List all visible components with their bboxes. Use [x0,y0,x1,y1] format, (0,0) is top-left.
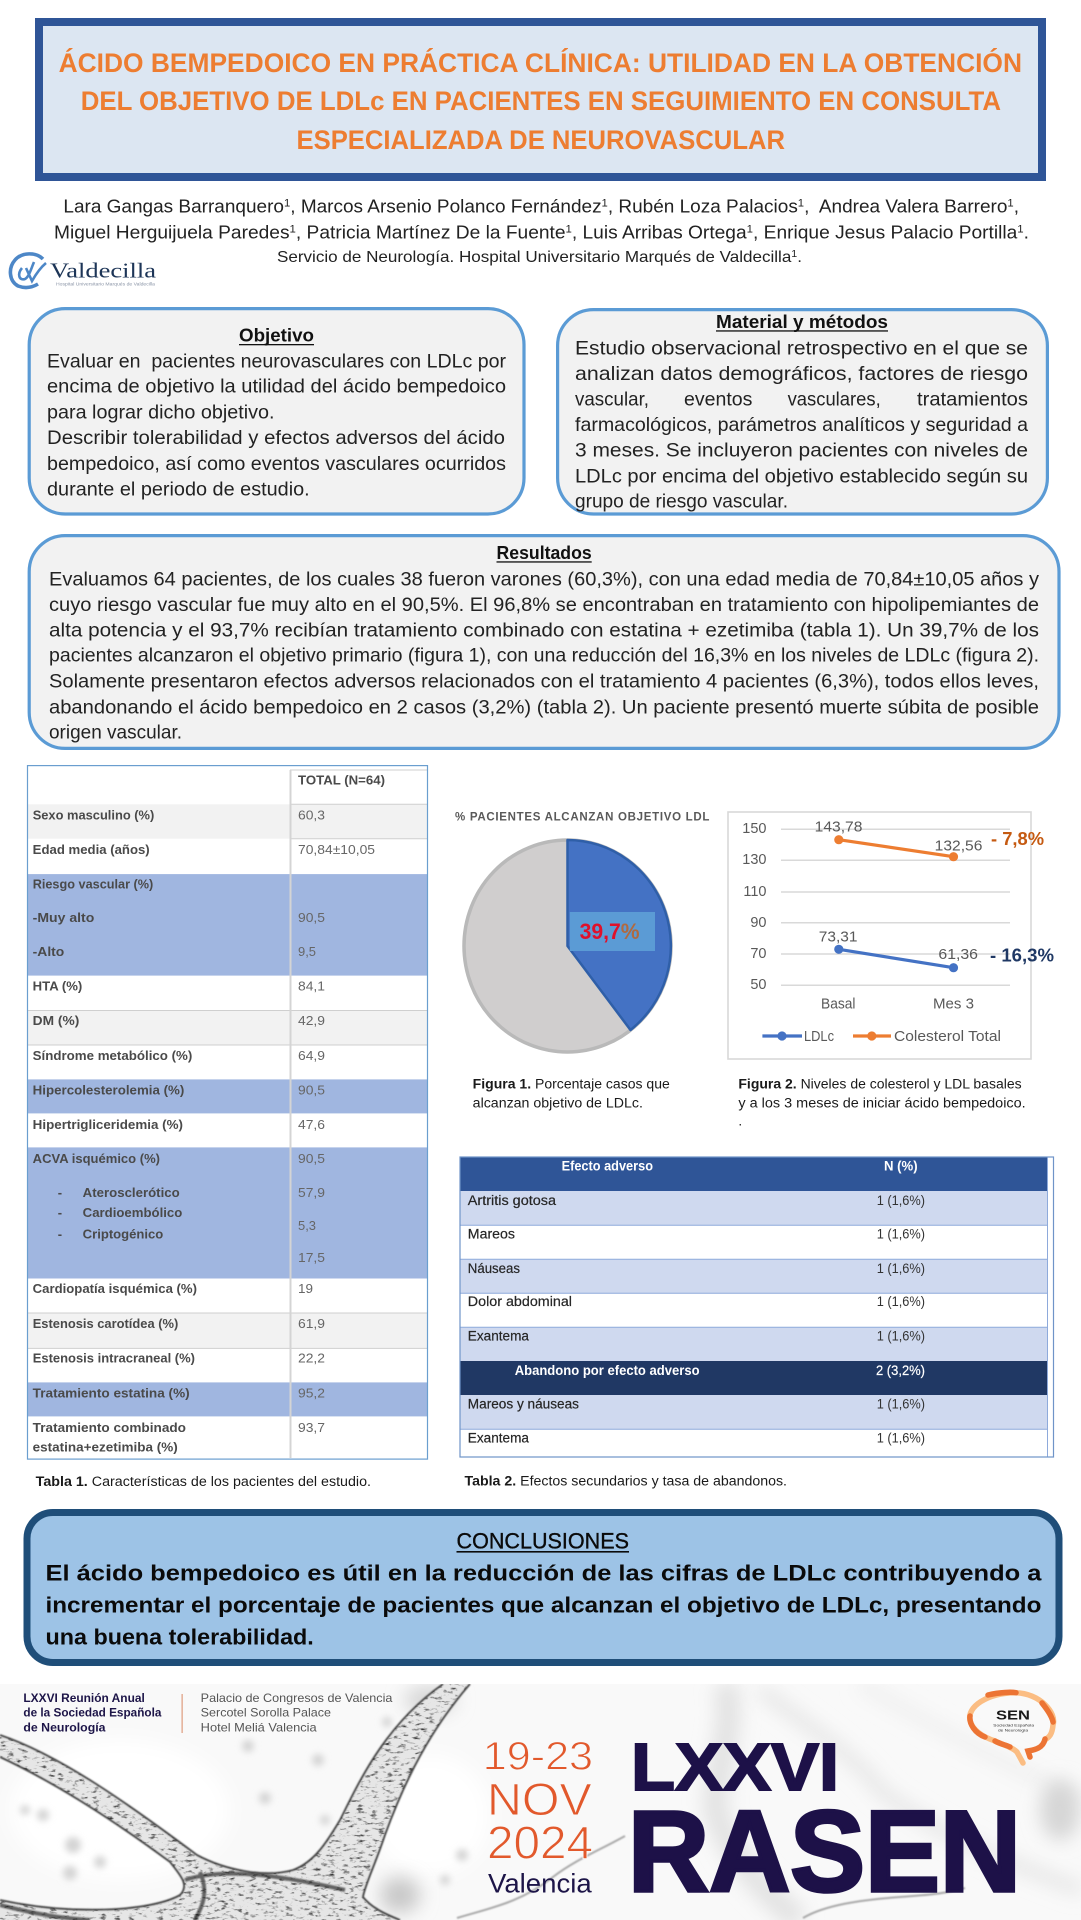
table 2: adverse effects: Exantema [468,1431,529,1446]
text: material y métodos: analizan datos demográficos, factores de riesgo [575,363,1028,385]
congress wordmark: RASEN [628,1788,1021,1916]
table 1: patient characteristics: 90,5 [298,1082,325,1098]
series: LDLc [834,945,958,972]
table 1: patient characteristics: 42,9 [298,1013,325,1028]
text: material y métodos: eventos [684,389,753,411]
authors and affiliation: 1 [1017,224,1024,236]
authors and affiliation: , Rubén Loza Palacios [608,196,798,217]
caption: figura 2 [738,1076,1026,1129]
data labels: 61,36 [938,947,978,963]
table 1: patient characteristics: ACVA isquémico (%) [33,1151,160,1166]
panel: objetivo [29,309,524,514]
venue and meeting text: Sercotel Sorolla Palace [201,1706,331,1720]
authors and affiliation: Miguel Herguijuela Paredes [54,222,281,243]
value label: 39,7% [580,919,640,944]
y axis labels: 130 [742,852,766,868]
table 2: adverse effects: 1 (1,6%) [877,1329,925,1344]
table 1: patient characteristics: 57,9 [298,1185,325,1200]
rows [460,1157,1054,1457]
text: objetivo: durante el periodo de estudio. [47,479,310,501]
y axis labels [742,821,766,993]
table 2: adverse effects: N (%) [884,1159,918,1174]
text: material y métodos [575,337,1028,513]
x axis labels: Mes 3 [933,997,974,1013]
neuron texture [0,1684,480,1920]
callout: LDLc change: - 16,3% [990,946,1054,966]
authors and affiliation: 1 [791,249,798,260]
caption: figura 1 [473,1076,670,1110]
table 1: patient characteristics: Síndrome metabólico (%) [33,1048,192,1063]
data labels [815,820,982,963]
legend [762,1029,1001,1045]
venue and meeting text: LXXVI Reunión Anual [23,1691,145,1705]
y axis labels: 50 [750,977,766,993]
title text: ESPECIALIZADA DE NEUROVASCULAR [296,125,785,155]
text: resultados: origen vascular. [49,722,182,744]
text: conclusiones: El ácido bempedoico es útil en la reducción de las cifras de LDLc contribuyendo a [46,1561,1042,1586]
table 1: patient characteristics: Edad media (años) [33,842,150,857]
text: objetivo: Evaluar en pacientes neurovasculares con LDLc por [47,351,507,373]
venue and meeting text [23,1691,393,1735]
background: blurred neurons [0,1684,1081,1920]
title text: DEL OBJETIVO DE LDLc EN PACIENTES EN SEGUIMIENTO EN CONSULTA [81,86,1001,116]
table 2: adverse effects: Náuseas [468,1261,520,1276]
logo: SEN brain: de Neurología [998,1728,1029,1732]
authors and affiliation: Servicio de Neurología. Hospital Universitario Marqués de Valdecilla [277,249,760,266]
table 1: patient characteristics: 61,9 [298,1316,325,1331]
table 1: patient characteristics: estatina+ezetimiba (%) [33,1440,178,1455]
table 1: patient characteristics: - [58,1205,62,1220]
text: resultados [49,569,1039,744]
text: resultados: cuyo riesgo vascular fue muy alto en el 90,5%. El 96,8% se encontraban en tratamiento con hipolipemiantes de [49,594,1039,616]
table 1: patient characteristics: HTA (%) [33,979,82,994]
table 2: adverse effects: 1 (1,6%) [877,1396,925,1411]
authors and affiliation: 1 [566,224,572,236]
data labels: 132,56 [935,838,982,854]
text: material y métodos: LDLc por encima del objetivo establecido según su [575,465,1028,487]
table 1: patient characteristics: 93,7 [298,1420,325,1435]
authors and affiliation: , Andrea Valera Barrero [804,196,1007,217]
authors and affiliation: Lara Gangas Barranquero [63,196,278,217]
logo: Valdecilla: Valdecilla [50,259,157,283]
congress wordmark: LXXVI [631,1730,839,1805]
congress wordmark [628,1730,1021,1916]
table 2: adverse effects: Exantema [468,1329,529,1344]
table 1: patient characteristics: Estenosis intracraneal (%) [33,1351,195,1366]
y axis labels: 150 [742,821,766,837]
text: conclusiones: una buena tolerabilidad. [46,1624,314,1649]
text: objetivo: encima de objetivo la utilidad del ácido bempedoico [47,376,506,398]
legend: LDLc [804,1029,834,1045]
authors and affiliation: . [797,249,802,266]
table 1: patient characteristics: 95,2 [298,1386,325,1400]
table 1: patient characteristics: 64,9 [298,1048,325,1063]
panel: conclusiones [27,1512,1059,1662]
title panel [39,22,1042,177]
table 1: patient characteristics: Hipercolesterolemia (%) [33,1082,184,1098]
text: conclusiones: incrementar el porcentaje de pacientes que alcanzan el objetivo de LDLc, presentando [46,1593,1041,1618]
text: material y métodos: grupo de riesgo vascular. [575,491,788,513]
thin neurites [457,1836,965,1918]
venue and meeting text: de Neurología [23,1721,106,1735]
table 1: patient characteristics: 84,1 [298,979,325,994]
neuron outline [0,1684,470,1920]
y axis labels: 110 [743,884,766,900]
heading: resultados: Resultados [496,542,592,563]
legend: Colesterol Total [894,1029,1001,1045]
authors and affiliation: , Patricia Martínez De la Fuente [296,222,566,243]
table 1: patient characteristics: Cardiopatía isquémica (%) [33,1281,197,1296]
table 2: adverse effects: 1 (1,6%) [877,1227,925,1242]
title text: ÁCIDO BEMPEDOICO EN PRÁCTICA CLÍNICA: UTILIDAD EN LA OBTENCIÓN [59,47,1022,78]
table 1: patient characteristics: Tratamiento estatina (%) [33,1386,190,1400]
logo: Valdecilla: Hospital Universitario Marqués de Valdecilla [56,282,156,287]
dates and city: 19-23 [483,1734,593,1778]
series: colesterol total [834,835,958,861]
authors and affiliation: 1 [798,198,804,210]
neuron fill [0,1684,470,1920]
logo: SEN brain [970,1692,1054,1763]
value label [570,912,655,951]
text: resultados: pacientes alcanzaron el objetivo primario (figura 1), con una reducción del 16,3% en los niveles de LDLc (figura 2). [49,645,1039,667]
heading: material y métodos: Material y métodos [716,311,888,332]
logo: Valdecilla [10,254,157,287]
table 1: patient characteristics: -Alto [33,944,64,959]
text: material y métodos: Estudio observacional retrospectivo en el que se [575,337,1028,359]
table 1: patient characteristics: Riesgo vascular (%) [33,877,153,892]
text: resultados: Solamente presentaron efectos adversos relacionados con el tratamiento 4 pacientes (6,3%), todos ellos leves, [49,671,1039,693]
table 2: adverse effects: 1 (1,6%) [877,1431,925,1446]
table 2: adverse effects: Mareos y náuseas [468,1396,579,1411]
authors and affiliation: , [1014,196,1019,217]
table 1: patient characteristics: 70,84±10,05 [298,842,375,857]
caption: figura 1: Figura 1. Porcentaje casos que [473,1076,670,1091]
table 1: patient characteristics: 47,6 [298,1117,325,1132]
authors and affiliation: 1 [290,224,296,236]
table 1: patient characteristics: 17,5 [298,1250,325,1265]
text: objetivo [47,351,507,501]
text: resultados: abandonando el ácido bempedoico en 2 casos (3,2%) (tabla 2). Un paciente presentó muerte súbita de posible [49,696,1039,718]
text: resultados: Evaluamos 64 pacientes, de los cuales 38 fueron varones (60,3%), con una edad media de 70,84±10,05 años y [49,569,1039,591]
table 1: patient characteristics: Cardioembólico [83,1205,182,1220]
caption: figura 2: y a los 3 meses de iniciar ácido bempedoico. [738,1095,1026,1110]
caption: tabla 1: Tabla 1. Características de los pacientes del estudio. [36,1474,371,1489]
line chart: colesterol and LDLc [728,812,1031,1059]
table 1: patient characteristics: Criptogénico [83,1226,163,1241]
caption: figura 1: alcanzan objetivo de LDLc. [473,1095,643,1110]
x axis labels: Basal [821,997,856,1013]
table 1: patient characteristics: -Muy alto [33,910,94,925]
heading: objetivo: Objetivo [239,325,314,346]
table 2: adverse effects: Abandono por efecto adverso [515,1363,700,1378]
text: objetivo: bempedoico, así como eventos vasculares ocurridos [47,453,506,475]
title text [59,47,1022,155]
table 1: patient characteristics: 9,5 [298,944,316,959]
text: material y métodos: vascular, [575,389,649,411]
venue and meeting text: Hotel Meliá Valencia [201,1721,317,1735]
table 1: patient characteristics: Sexo masculino (%) [33,807,154,822]
text: material y métodos: farmacológicos, parámetros analíticos y seguridad a [575,414,1028,436]
table 1: patient characteristics: Hipertrigliceridemia (%) [33,1117,183,1132]
authors and affiliation: . [1024,222,1029,243]
table 1: patient characteristics: 22,2 [298,1351,325,1366]
panel: material y métodos [558,310,1047,514]
dates and city: 2024 [487,1816,593,1868]
table 1: patient characteristics [28,766,428,1459]
x axis labels [821,997,974,1013]
y axis labels: 70 [750,946,766,962]
authors and affiliation: , Enrique Jesus Palacio Portilla [753,222,1018,243]
table 2: adverse effects: 2 (3,2%) [876,1363,925,1378]
authors and affiliation: 1 [747,224,753,236]
heading: conclusiones: CONCLUSIONES [456,1528,629,1553]
text: material y métodos: vasculares, [788,389,881,411]
dates and city: NOV [487,1774,592,1825]
text: material y métodos: tratamientos [917,389,1028,411]
caption: figura 2: . [738,1114,742,1129]
venue and meeting text: de la Sociedad Española [23,1706,162,1720]
table 1: patient characteristics: 90,5 [298,1151,325,1166]
text: resultados: alta potencia y el 93,7% recibían tratamiento combinado con estatina + ezetimiba (tabla 1). Un 39,7% de los [49,620,1039,642]
authors and affiliation: 1 [602,198,608,210]
authors and affiliation [54,196,1029,266]
table 1: patient characteristics: 19 [298,1281,313,1296]
authors and affiliation: , Marcos Arsenio Polanco Fernández [290,196,602,217]
logo: SEN brain: SEN [996,1707,1030,1722]
table 1: patient characteristics: - [58,1185,62,1200]
table 2: adverse effects [460,1157,1054,1457]
text: material y métodos: 3 meses. Se incluyeron pacientes con niveles de [575,440,1028,462]
caption: figura 2: Figura 2. Niveles de colesterol y LDL basales [738,1076,1022,1091]
banner: LXXVI RASEN [0,1684,1081,1920]
table 1: patient characteristics: Aterosclerótico [83,1185,180,1200]
table 2: adverse effects: Artritis gotosa [468,1193,557,1208]
table 1: patient characteristics: 90,5 [298,910,325,925]
table 1: patient characteristics: 60,3 [298,807,325,822]
table 1: patient characteristics: TOTAL (N=64) [298,772,385,787]
data labels: 73,31 [819,930,858,946]
data labels: 143,78 [815,820,862,836]
pie chart: 39,7% [464,840,671,1052]
dates and city: Valencia [488,1868,593,1898]
table 2: adverse effects: Dolor abdominal [468,1294,572,1309]
text: conclusiones [46,1561,1042,1649]
dates and city [483,1734,593,1898]
table 2: adverse effects: 1 (1,6%) [877,1261,925,1276]
text: objetivo: Describir tolerabilidad y efectos adversos del ácido [47,427,505,449]
logo: SEN brain: Sociedad Española [993,1722,1035,1728]
table 1: patient characteristics: 5,3 [298,1218,316,1233]
y axis labels: 90 [750,915,766,931]
table 1: patient characteristics: Estenosis carotídea (%) [33,1316,178,1331]
venue and meeting text: Palacio de Congresos de Valencia [201,1691,393,1705]
striped row backgrounds [28,766,428,1459]
authors and affiliation: 1 [284,198,290,210]
table 1: patient characteristics: DM (%) [33,1013,79,1028]
callout: colesterol change: - 7,8% [991,829,1044,849]
table 2: adverse effects: Mareos [468,1227,515,1242]
table 2: adverse effects: Efecto adverso [562,1159,653,1174]
chart title: pie: % PACIENTES ALCANZAN OBJETIVO LDL [455,812,709,824]
authors and affiliation: , Luis Arribas Ortega [572,222,747,243]
authors and affiliation: 1 [1007,198,1014,210]
caption: tabla 2: Tabla 2. Efectos secundarios y tasa de abandonos. [464,1474,787,1489]
text: objetivo: para lograr dicho objetivo. [47,402,274,424]
table 2: adverse effects: 1 (1,6%) [877,1193,925,1208]
table 2: adverse effects: 1 (1,6%) [877,1294,925,1309]
table 1: patient characteristics: - [58,1226,62,1241]
blue slice [568,840,671,1030]
table 1: patient characteristics: Tratamiento combinado [33,1420,186,1435]
panel: resultados [29,536,1059,748]
